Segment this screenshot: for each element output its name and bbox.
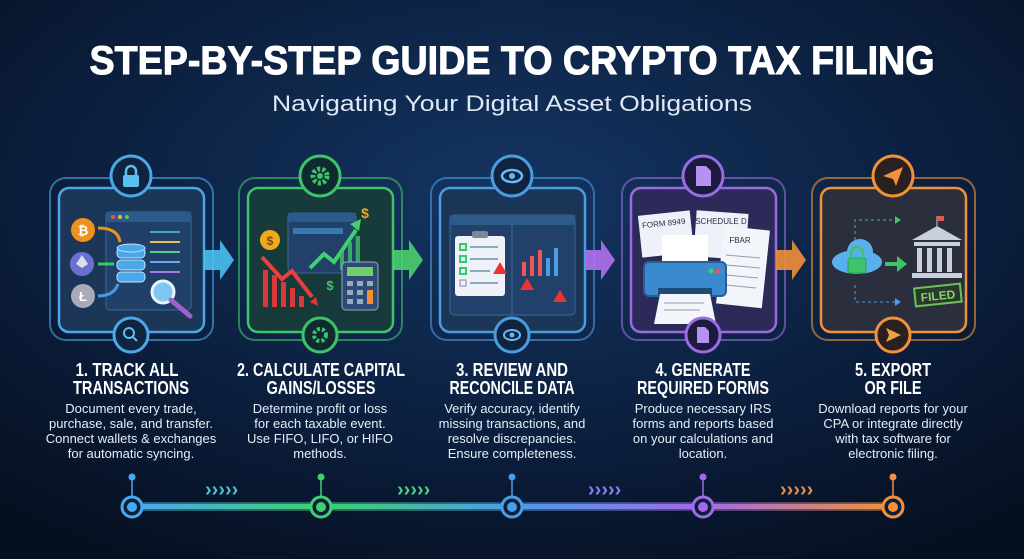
panel: 2 calculate <box>239 156 402 352</box>
panel: 4 forms <box>622 156 785 352</box>
text: step 3: Ensure completeness. <box>448 446 576 461</box>
text: step 5 <box>818 360 968 461</box>
text: step 4: Produce necessary IRS <box>635 401 772 416</box>
icon: magnifier <box>152 281 190 316</box>
text: step 2: Determine profit or loss <box>253 401 388 416</box>
timeline: ››››› <box>588 479 621 501</box>
icon: gear circle bottom <box>303 318 337 352</box>
icon: gear circle <box>300 156 340 196</box>
icon: filed stamp <box>914 284 962 306</box>
text: step 3: 3. REVIEW AND <box>456 360 568 380</box>
text: step 2: GAINS/LOSSES <box>266 378 376 398</box>
icon: database <box>117 244 145 282</box>
text: step 2: 2. CALCULATE CAPITAL <box>237 360 405 380</box>
icon: eye circle bottom <box>495 318 529 352</box>
panel: 3 review <box>431 156 594 352</box>
title: STEP-BY-STEP GUIDE TO CRYPTO TAX FILING <box>90 39 934 83</box>
text: step 2: Use FIFO, LIFO, or HIFO <box>247 431 393 446</box>
timeline: ››››› <box>780 479 813 501</box>
text: step 3: missing transactions, and <box>439 416 585 431</box>
text: step 5: electronic filing. <box>848 446 938 461</box>
timeline: ››››› <box>205 479 238 501</box>
icon: doc circle <box>683 156 723 196</box>
text: step 5: Download reports for your <box>818 401 968 416</box>
text: step 3 <box>439 360 585 461</box>
text: step 1: purchase, sale, and transfer. <box>49 416 213 431</box>
text: step 4: on your calculations and <box>633 431 773 446</box>
icon: send circle bottom <box>876 318 910 352</box>
icon: cloud lock <box>832 239 882 274</box>
icon: forms <box>638 210 770 308</box>
arrow 4 <box>776 240 806 280</box>
text: step 4: location. <box>679 446 727 461</box>
icon: bank <box>912 216 962 278</box>
chart: down red <box>262 257 318 307</box>
text: step 2 <box>237 360 405 461</box>
text: step 1: for automatic syncing. <box>68 446 194 461</box>
arrow 3 <box>585 240 615 280</box>
icon: dollar coin <box>260 205 369 250</box>
arrows: dotted <box>855 216 907 306</box>
icon: printer <box>644 235 726 324</box>
subtitle: Navigating Your Digital Asset Obligations <box>272 91 752 116</box>
arrow 2 <box>393 240 423 280</box>
text: step 4 <box>633 360 773 461</box>
text: step 5: 5. EXPORT <box>855 360 931 380</box>
text: step 1 <box>46 360 217 461</box>
icon: forms: FORM 8949 <box>642 217 686 230</box>
timeline: ››››› <box>397 479 430 501</box>
icon: forms: SCHEDULE D <box>695 217 747 226</box>
icon: calculator <box>326 262 378 310</box>
icon: coins: ₿ <box>78 223 88 238</box>
text: step 1: Document every trade, <box>65 401 197 416</box>
text: step 2: for each taxable event. <box>254 416 386 431</box>
icon: eye circle <box>492 156 532 196</box>
icon: coins <box>70 218 120 308</box>
text: step 5: OR FILE <box>864 378 922 398</box>
text: step 2: methods. <box>293 446 347 461</box>
timeline <box>122 474 903 517</box>
text: step 1: Connect wallets & exchanges <box>46 431 217 446</box>
icon: send circle <box>873 156 913 196</box>
icon: window <box>288 213 356 273</box>
icon: coins: Ł <box>79 289 87 304</box>
text: step 4: forms and reports based <box>633 416 773 431</box>
panel: 1 track <box>50 156 213 352</box>
icon: calculator: $ <box>326 278 334 293</box>
text: step 5: CPA or integrate directly <box>823 416 963 431</box>
text: step 1: 1. TRACK ALL <box>76 360 179 380</box>
text: step 3: RECONCILE DATA <box>450 378 574 398</box>
icon: clipboard window <box>450 215 575 315</box>
chart: up green <box>310 219 361 270</box>
panel: 5 export <box>812 156 975 352</box>
text: step 4: REQUIRED FORMS <box>637 378 769 398</box>
icon: lock circle <box>111 156 151 196</box>
text: step 3: Verify accuracy, identify <box>444 401 580 416</box>
icon: search circle <box>114 318 148 352</box>
text: step 3: resolve discrepancies. <box>448 431 576 446</box>
text: step 1: TRANSACTIONS <box>73 378 189 398</box>
text: step 5: with tax software for <box>834 431 951 446</box>
text: step 4: 4. GENERATE <box>656 360 750 380</box>
icon: doc circle bottom <box>686 318 720 352</box>
icon: filed stamp: FILED <box>920 287 956 305</box>
arrow 1 <box>204 240 234 280</box>
icon: window <box>106 212 191 310</box>
icon: dollar coin: $ <box>267 234 274 248</box>
icon: forms: FBAR <box>729 236 751 245</box>
icon: dollar coin: $ <box>361 205 369 221</box>
